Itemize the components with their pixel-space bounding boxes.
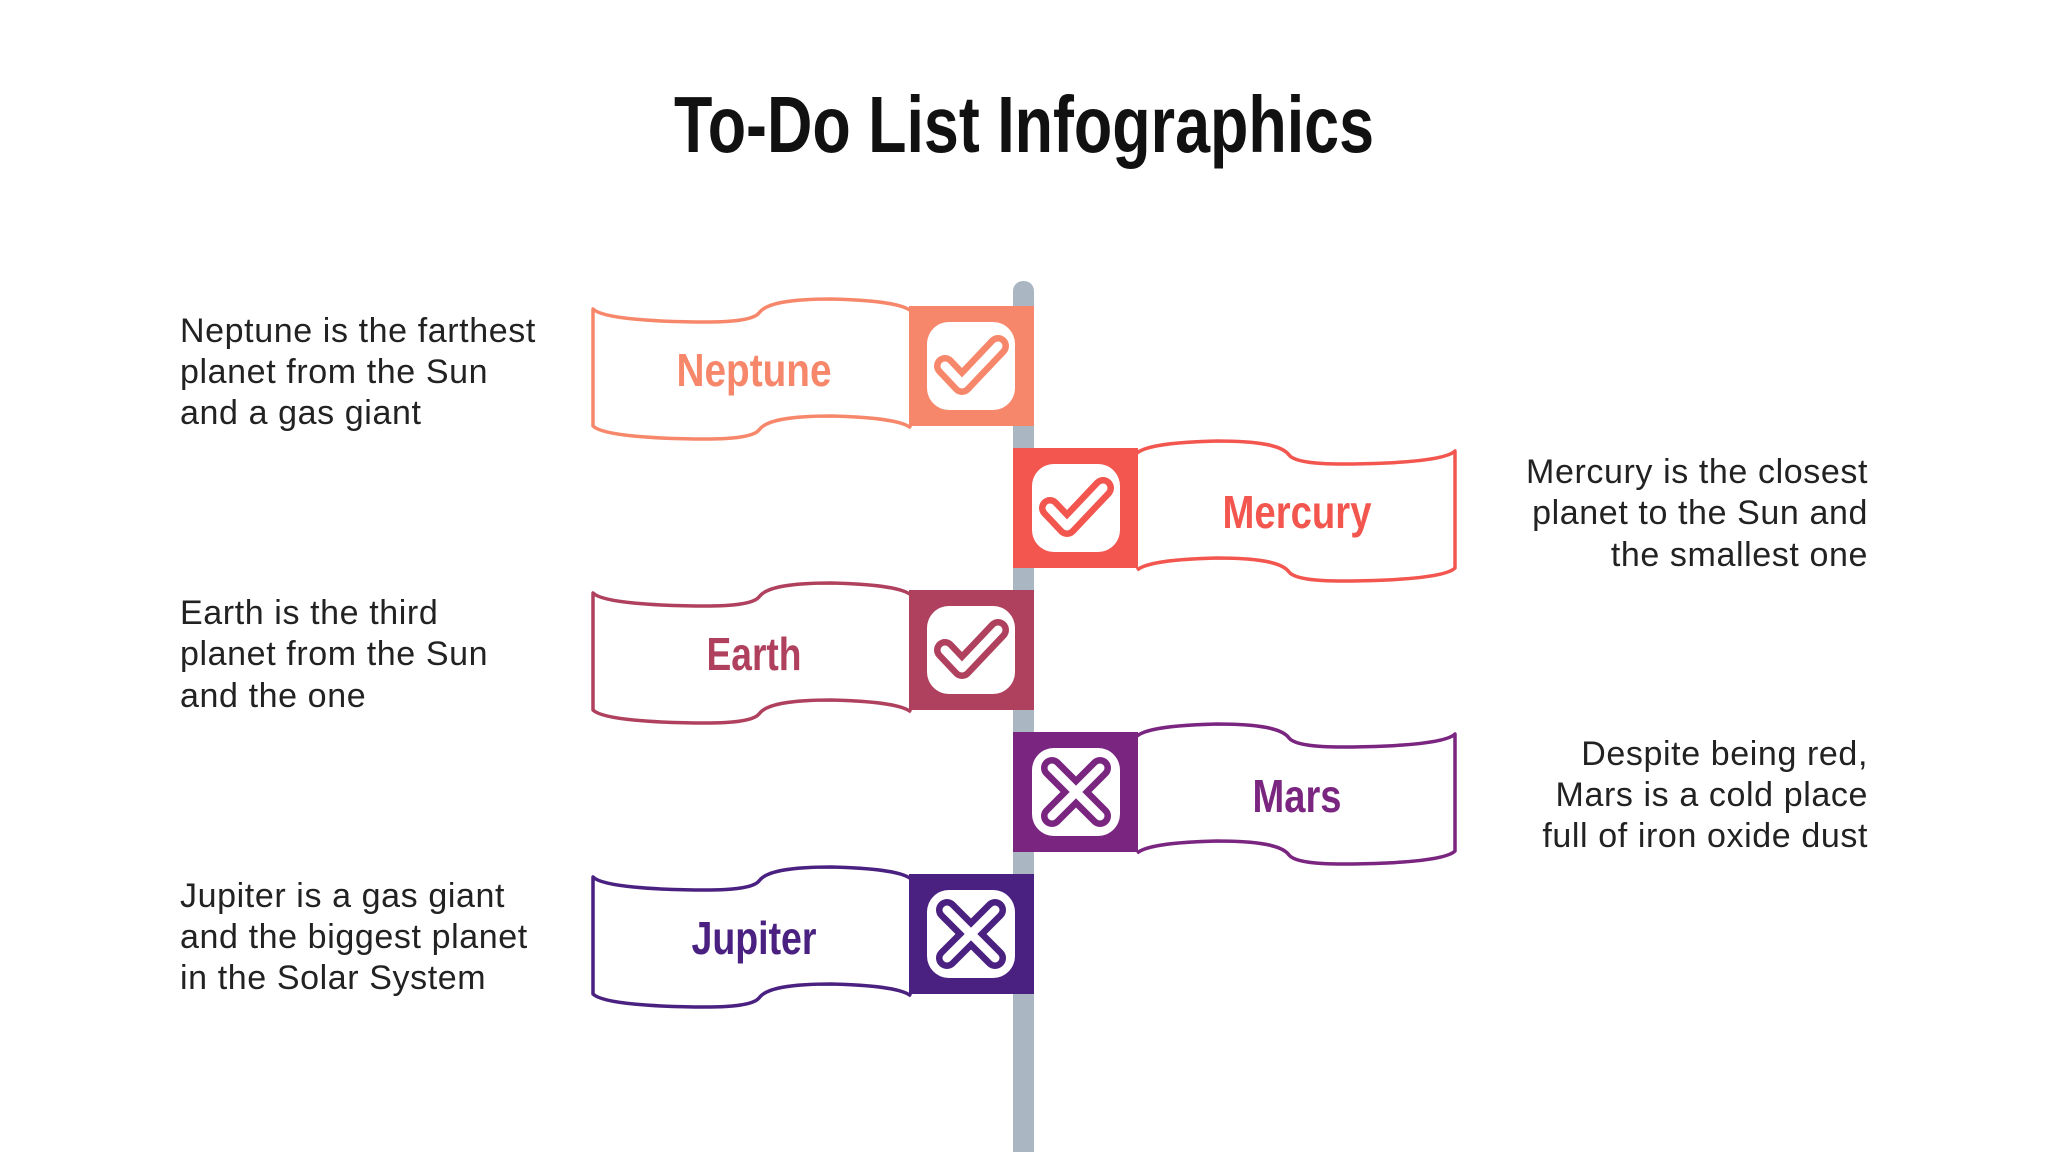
text: Mercury description: Mercury is the closest xyxy=(1526,453,1868,491)
text: Mars description: Despite being red, xyxy=(1581,735,1868,773)
text: Jupiter description: in the Solar System xyxy=(180,959,486,997)
text: Neptune description: and a gas giant xyxy=(180,394,422,432)
label: Mars: Mars xyxy=(1252,770,1342,822)
item: Mars xyxy=(1013,724,1455,864)
item: Jupiter xyxy=(593,867,1034,1007)
label: Neptune: Neptune xyxy=(676,344,832,396)
text: Mercury description: planet to the Sun and xyxy=(1532,494,1868,532)
pole xyxy=(1013,281,1034,1152)
text: Mars description: full of iron oxide dust xyxy=(1542,817,1868,855)
text: Earth description: and the one xyxy=(180,677,366,715)
title: To-Do List Infographics xyxy=(674,80,1374,169)
item: Neptune xyxy=(593,299,1034,439)
box: Mercury check xyxy=(1013,448,1138,568)
label: Mercury: Mercury xyxy=(1222,486,1372,538)
item: Mercury xyxy=(1013,441,1455,581)
text: Earth description: planet from the Sun xyxy=(180,635,488,673)
box: Earth check xyxy=(909,590,1034,710)
flag: Mars xyxy=(1137,724,1455,864)
text: Neptune description: planet from the Sun xyxy=(180,353,488,391)
text: Neptune description: Neptune is the farthest xyxy=(180,312,536,350)
box: Neptune check xyxy=(909,306,1034,426)
label: Jupiter: Jupiter xyxy=(692,912,817,964)
flag: Jupiter xyxy=(593,867,911,1007)
text: Mars description: Mars is a cold place xyxy=(1556,776,1868,814)
text: Jupiter description: Jupiter is a gas giant xyxy=(180,877,505,915)
text: Mercury description: the smallest one xyxy=(1611,536,1868,574)
text: Jupiter description: and the biggest planet xyxy=(180,918,528,956)
text: Earth description: Earth is the third xyxy=(180,594,438,632)
flag: Neptune xyxy=(593,299,911,439)
item: Earth xyxy=(593,583,1034,723)
flag: Mercury xyxy=(1137,441,1455,581)
box: Mars cross xyxy=(1013,732,1138,852)
label: Earth: Earth xyxy=(706,628,802,680)
box: Jupiter cross xyxy=(909,874,1034,994)
flag: Earth xyxy=(593,583,911,723)
